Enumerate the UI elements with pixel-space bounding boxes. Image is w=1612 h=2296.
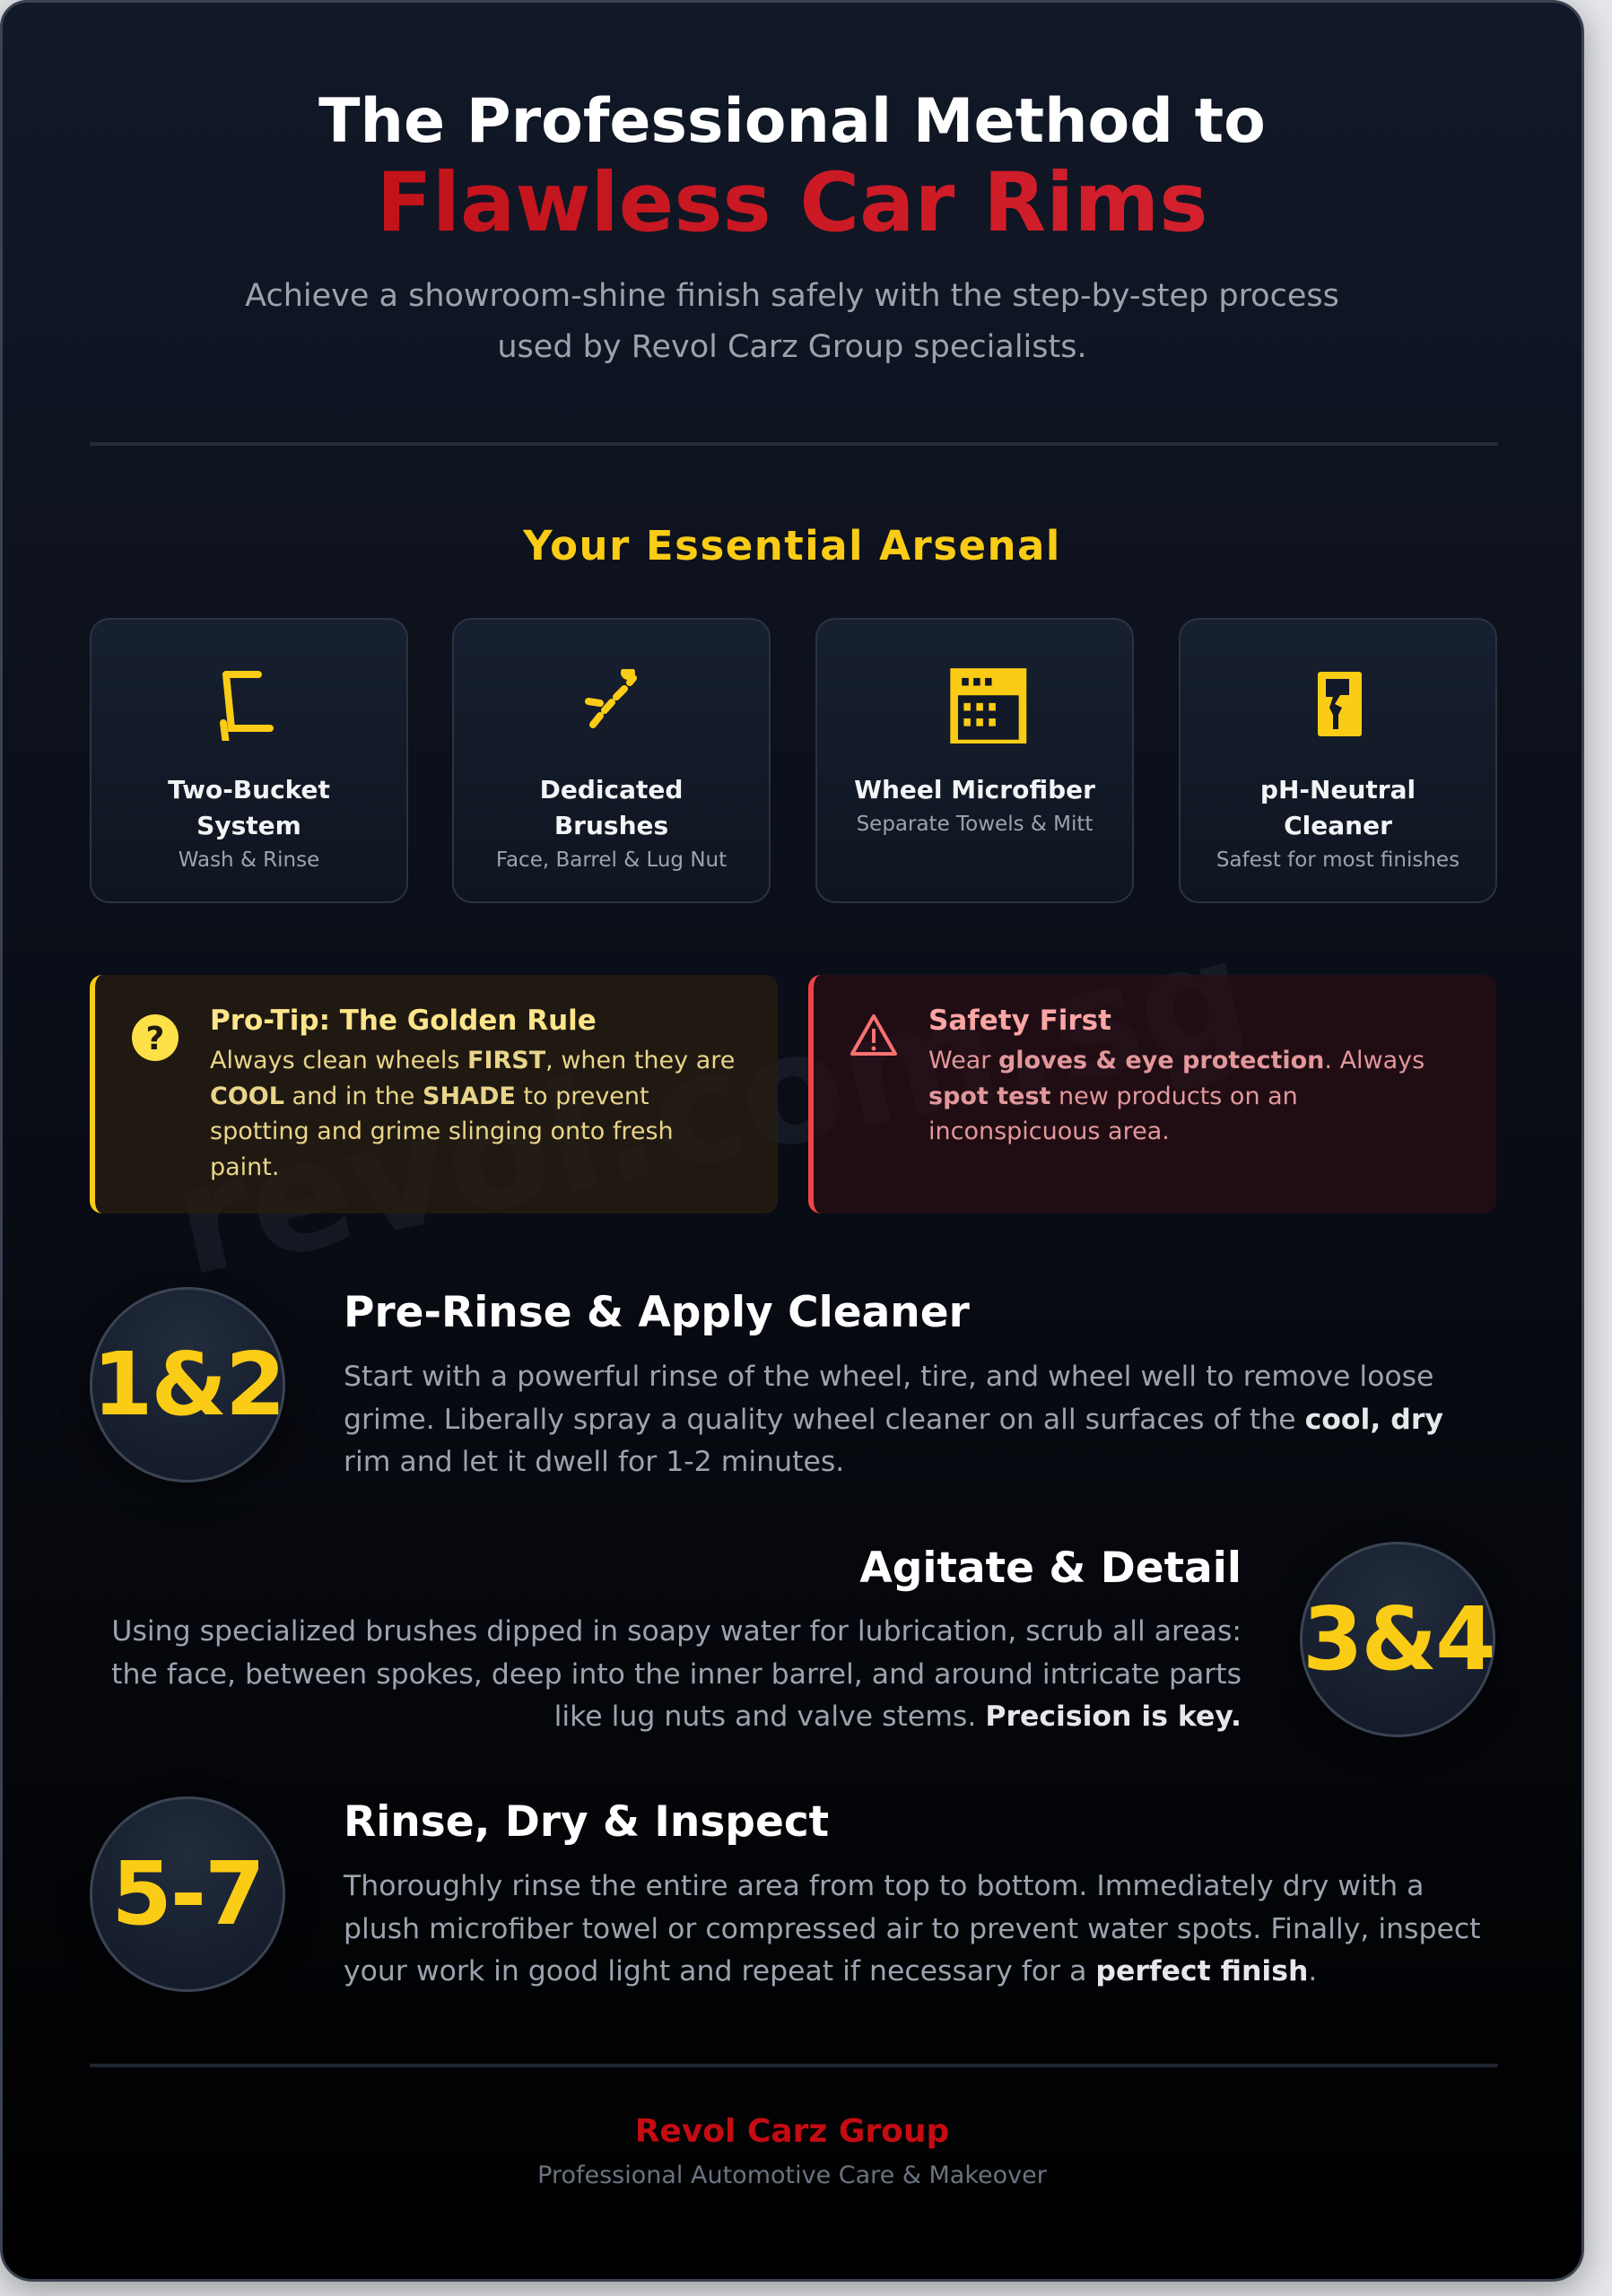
badge — [90, 1796, 285, 1992]
icon: question: ? — [146, 1021, 164, 1057]
callout: safety: Safety First — [928, 1004, 1111, 1037]
badge: 3&4 — [1303, 1588, 1494, 1690]
callout: pro-tip: Always clean wheels FIRST, when they are COOL and in the SHADE to prevent spotting and grime slinging onto fresh — [210, 1047, 735, 1145]
tool: cleaner: Cleaner — [1284, 811, 1392, 840]
icon: brush — [585, 669, 637, 728]
tool: two-bucket: Wash & Rinse — [179, 848, 319, 872]
tool: cleaner: Safest for most finishes — [1216, 848, 1460, 872]
icon: warning — [850, 1013, 897, 1056]
watermark: revol.com.sg — [159, 904, 1263, 1310]
subtitle: Achieve a showroom-shine finish safely with the step-by-step process used by Revol Carz Group specialists. — [245, 278, 1339, 365]
callout: safety — [808, 975, 1496, 1213]
step 1&2: Start with a powerful rinse of the wheel, tire, and wheel well to remove loose grime. Liberally spray a quality wheel cleaner on all surfaces of the cool, dry rim and let it dwell for 1-2 minutes. — [344, 1361, 1443, 1478]
section heading: Your Essential Arsenal — [523, 522, 1061, 570]
step 3&4 — [111, 1542, 1495, 1737]
step 5-7 — [90, 1796, 1481, 1992]
tool: microfiber — [815, 618, 1134, 903]
step 3&4: Agitate & Detail — [859, 1544, 1242, 1593]
tool: microfiber: Wheel Microfiber — [854, 775, 1095, 804]
icon: bucket — [220, 671, 274, 741]
badge — [1300, 1542, 1495, 1737]
callout: pro-tip — [90, 975, 778, 1213]
footer brand: Revol Carz Group — [635, 2113, 949, 2150]
step 5-7: Rinse, Dry & Inspect — [344, 1797, 829, 1847]
callout: pro-tip: Pro-Tip: The Golden Rule — [210, 1004, 597, 1037]
tool: cleaner — [1179, 618, 1497, 903]
step 1&2: Pre-Rinse & Apply Cleaner — [344, 1288, 970, 1337]
tool: brushes — [452, 618, 771, 903]
badge: 5-7 — [111, 1843, 264, 1944]
step 1&2 — [90, 1287, 1443, 1483]
icon: towel grid — [950, 668, 1026, 744]
step 3&4: Using specialized brushes dipped in soapy water for lubrication, scrub all areas: the face, between spokes, deep into the inner barrel, and around intricate parts like lug nuts and valve stems. Precision is key. — [111, 1615, 1242, 1733]
callout: safety: Wear gloves & eye protection. Always spot test new products on an inconspicuous area. — [928, 1047, 1425, 1145]
icon: question — [132, 1014, 179, 1061]
tool: microfiber: Separate Towels & Mitt — [857, 813, 1093, 836]
tool: two-bucket: Two-Bucket — [168, 775, 330, 804]
title: The Professional Method to — [318, 86, 1266, 157]
step 5-7: Thoroughly rinse the entire area from top to bottom. Immediately dry with a plush microfiber towel or compressed air to prevent water spots. Finally, inspect your work in good light and repeat if necessary for a perfect finish. — [344, 1870, 1481, 1987]
footer tagline: Professional Automotive Care & Makeover — [537, 2161, 1047, 2189]
tool: brushes: Dedicated — [540, 775, 683, 804]
tool: brushes: Brushes — [554, 811, 668, 840]
tool: two-bucket: System — [196, 811, 301, 840]
title highlight — [0, 150, 1584, 257]
badge: 1&2 — [92, 1334, 284, 1435]
tool: two-bucket — [90, 618, 408, 903]
badge — [90, 1287, 285, 1483]
tool: brushes: Face, Barrel & Lug Nut — [496, 848, 727, 872]
callout: pro-tip: paint. — [210, 1153, 279, 1180]
tool: cleaner: pH-Neutral — [1260, 775, 1416, 804]
icon: spray bottle — [1318, 672, 1362, 736]
